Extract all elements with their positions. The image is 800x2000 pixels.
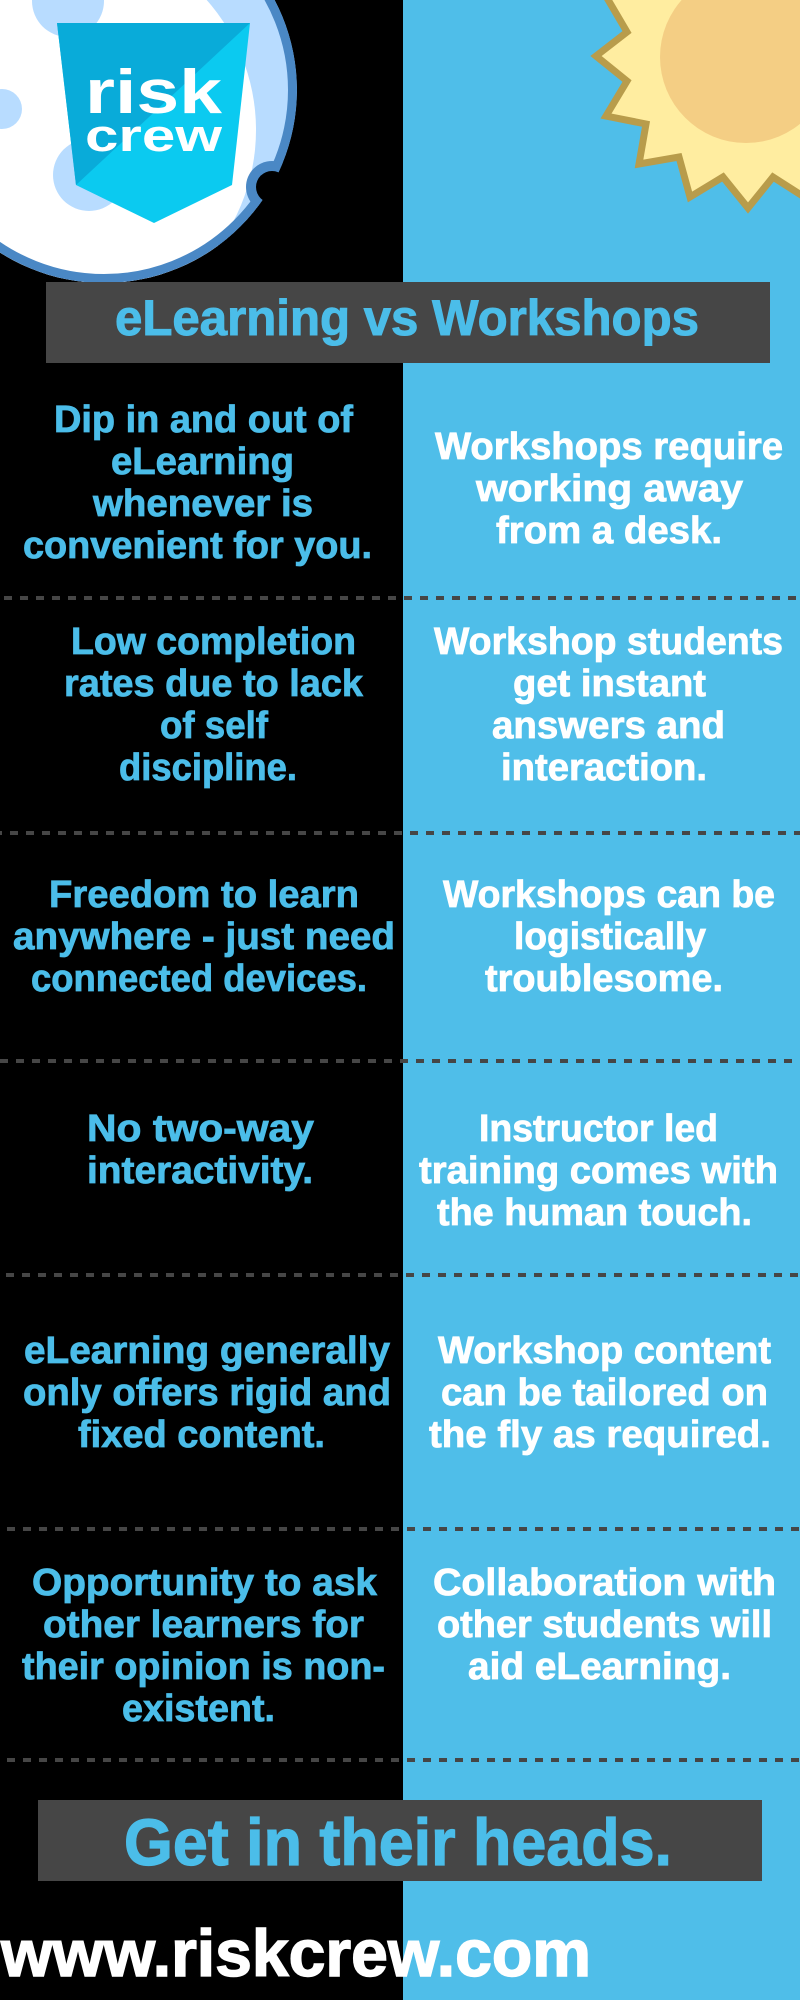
row 3 left: freedom: anywhere - just need	[13, 916, 395, 958]
panel: eLearning black background	[0, 0, 403, 2000]
row 5 left: rigid content	[23, 1330, 391, 1456]
row 5 right: tailored content	[429, 1330, 771, 1456]
row 5 left: rigid content: only offers rigid and	[23, 1372, 391, 1414]
row 5 left: rigid content: fixed content.	[78, 1414, 325, 1456]
row 2 left: low completion: Low completion	[71, 621, 356, 663]
row 4 right: human touch: training comes with	[419, 1150, 778, 1192]
row 6 right: collaboration: Collaboration with	[433, 1562, 776, 1604]
row 2 right: instant answers: interaction.	[501, 747, 707, 789]
row 1 right: away from desk	[435, 426, 783, 552]
icon: sun	[596, 0, 800, 208]
row 2 left: low completion: rates due to lack	[64, 663, 364, 705]
icon: risk crew shield logo	[57, 23, 250, 223]
row 6 left: peer opinion: their opinion is non-	[22, 1646, 385, 1688]
row 1 left: convenience	[23, 399, 372, 567]
row 6 left: peer opinion: Opportunity to ask	[32, 1562, 378, 1604]
row 6 left: peer opinion: existent.	[122, 1688, 275, 1730]
row 2 right: instant answers: answers and	[492, 705, 725, 747]
row 4 left: interactivity	[87, 1108, 314, 1192]
row 1 right: away from desk: from a desk.	[496, 510, 722, 552]
row 6 right: collaboration	[433, 1562, 776, 1688]
tagline text: Get in their heads.	[124, 1805, 672, 1879]
row 1 right: away from desk: working away	[475, 468, 743, 510]
row 5 left: rigid content: eLearning generally	[24, 1330, 390, 1372]
icon: moon with crater and logo backdrop	[0, 0, 297, 282]
website url: www.riskcrew.com	[0, 1916, 591, 1990]
row 4 right: human touch: Instructor led	[479, 1108, 718, 1150]
row 2 left: low completion	[64, 621, 364, 789]
row 6 right: collaboration: aid eLearning.	[468, 1646, 731, 1688]
row 2 left: low completion: discipline.	[119, 747, 297, 789]
row 3 left: freedom: Freedom to learn	[49, 874, 359, 916]
row 1 left: convenience: Dip in and out of	[54, 399, 353, 441]
row 3 left: freedom	[13, 874, 395, 1000]
title banner	[46, 282, 770, 363]
row 5 right: tailored content: the fly as required.	[429, 1414, 771, 1456]
row 5 right: tailored content: can be tailored on	[441, 1372, 768, 1414]
title text: eLearning vs Workshops	[115, 290, 699, 346]
row 6 right: collaboration: other students will	[437, 1604, 772, 1646]
row 2 right: instant answers: get instant	[513, 663, 706, 705]
tagline banner	[38, 1800, 762, 1881]
row 1 left: convenience: convenient for you.	[23, 525, 372, 567]
row 4 left: interactivity: interactivity.	[87, 1150, 313, 1192]
row 3 right: logistics	[443, 874, 775, 1000]
row 2 left: low completion: of self	[160, 705, 268, 747]
row 1 left: convenience: eLearning	[111, 441, 294, 483]
row 2 right: instant answers: Workshop students	[434, 621, 783, 663]
logo word: risk: risk	[85, 58, 223, 127]
row 4 right: human touch: the human touch.	[437, 1192, 752, 1234]
row 6 left: peer opinion	[22, 1562, 385, 1730]
row 4 right: human touch	[419, 1108, 778, 1234]
row 2 right: instant answers	[434, 621, 783, 789]
row 6 left: peer opinion: other learners for	[43, 1604, 364, 1646]
row 1 left: convenience: whenever is	[92, 483, 313, 525]
row 4 left: interactivity: No two-way	[87, 1108, 314, 1150]
logo word: crew: crew	[85, 110, 223, 161]
panel: workshops blue background	[403, 0, 800, 2000]
row 1 right: away from desk: Workshops require	[435, 426, 783, 468]
row 3 left: freedom: connected devices.	[31, 958, 367, 1000]
row 5 right: tailored content: Workshop content	[438, 1330, 771, 1372]
row 3 right: logistics: troublesome.	[485, 958, 723, 1000]
row 3 right: logistics: logistically	[514, 916, 706, 958]
row 3 right: logistics: Workshops can be	[443, 874, 775, 916]
